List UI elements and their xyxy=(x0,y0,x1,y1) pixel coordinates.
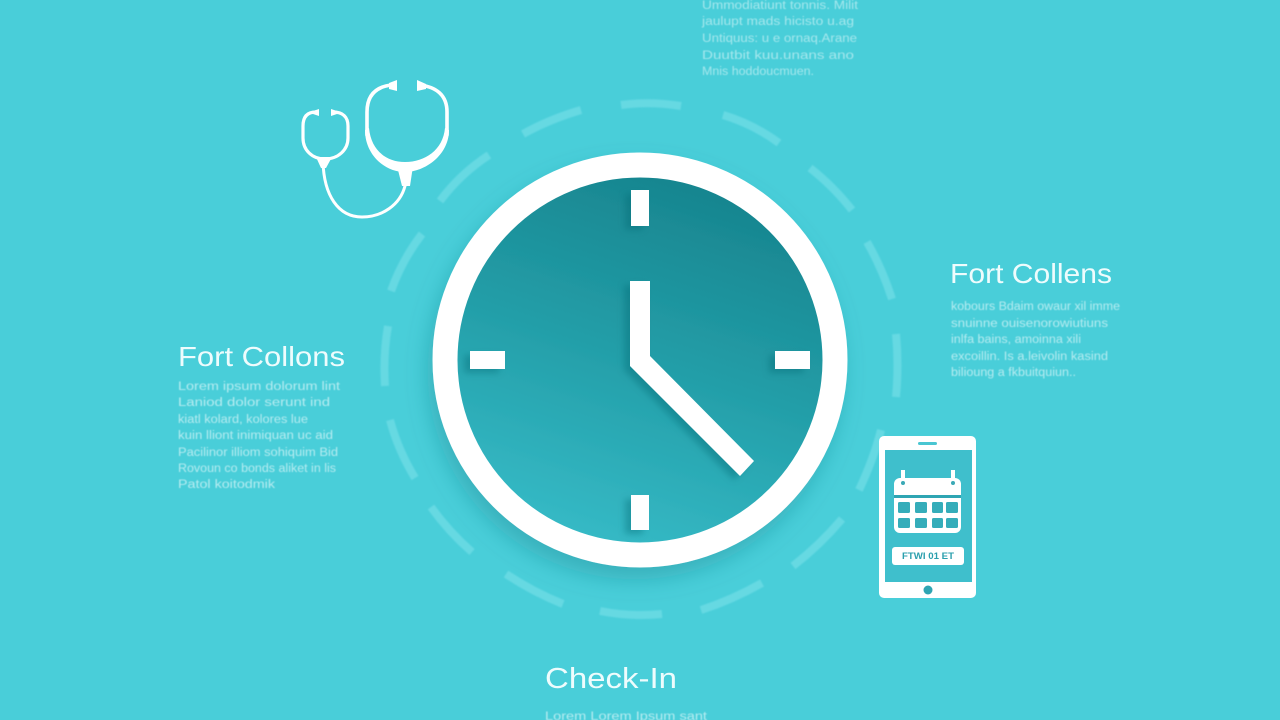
text block: left xyxy=(178,381,341,491)
clock xyxy=(445,165,835,555)
speaker xyxy=(918,442,937,445)
text block: left: kiatl kolard, kolores lue xyxy=(178,414,308,426)
text block: right: excoillin. Is a.leivolin kasind xyxy=(951,351,1108,363)
small headset joint xyxy=(316,157,332,168)
text block: left: Patol koitodmik xyxy=(178,479,275,491)
text block: top: Untiquus: u e ornaq.Arane xyxy=(702,33,857,45)
clock hands xyxy=(630,281,754,476)
phone button xyxy=(892,547,964,565)
text block: left: Rovoun co bonds aliket in lis xyxy=(178,463,336,475)
thick lower part of headset xyxy=(365,128,449,172)
home button xyxy=(924,586,932,594)
phone body xyxy=(879,436,976,598)
text block: left: Lorem ipsum dolorum lint xyxy=(178,381,341,393)
text block: right xyxy=(951,301,1120,379)
clock outer ring xyxy=(445,165,835,555)
text block: top: Ummodiatiunt tonnis. Milit xyxy=(702,0,859,12)
text block: top xyxy=(701,0,859,78)
heading: Fort Collons (left): Fort Collons xyxy=(178,341,345,372)
dashed ring around clock xyxy=(384,103,897,615)
text block: top: jaulupt mads hicisto u.ag xyxy=(701,16,854,28)
icon: phone with calendar xyxy=(879,436,976,598)
calendar xyxy=(894,470,961,533)
text block: right: kobours Bdaim owaur xil imme xyxy=(951,301,1120,313)
text block: left: kuin lliont inimiquan uc aid xyxy=(178,430,333,442)
heading: Fort Collons (right): Fort Collens xyxy=(950,258,1112,289)
hour ticks xyxy=(470,190,810,530)
earpieces xyxy=(313,80,426,116)
text block: right: snuinne ouisenorowiutiuns xyxy=(951,318,1108,330)
phone screen xyxy=(885,450,972,582)
text block: top: Duutbit kuu.unans ano xyxy=(702,50,854,62)
text block: top: Mnis hoddoucmuen. xyxy=(702,66,814,78)
text block: right: bilioung a fkbuitquiun.. xyxy=(951,367,1076,379)
icon: stethoscope xyxy=(303,80,449,217)
phone button: FTWI 01 ET xyxy=(902,551,954,562)
heading: Check-In: Check-In xyxy=(545,663,677,695)
large headset xyxy=(367,85,447,135)
tube xyxy=(323,162,405,217)
small headset xyxy=(303,112,348,159)
stem xyxy=(397,166,413,186)
text block: left: Laniod dolor serunt ind xyxy=(178,397,330,409)
text block: left: Pacilinor illiom sohiquim Bid xyxy=(178,447,338,459)
text block: right: inlfa bains, amoinna xili xyxy=(951,334,1081,346)
